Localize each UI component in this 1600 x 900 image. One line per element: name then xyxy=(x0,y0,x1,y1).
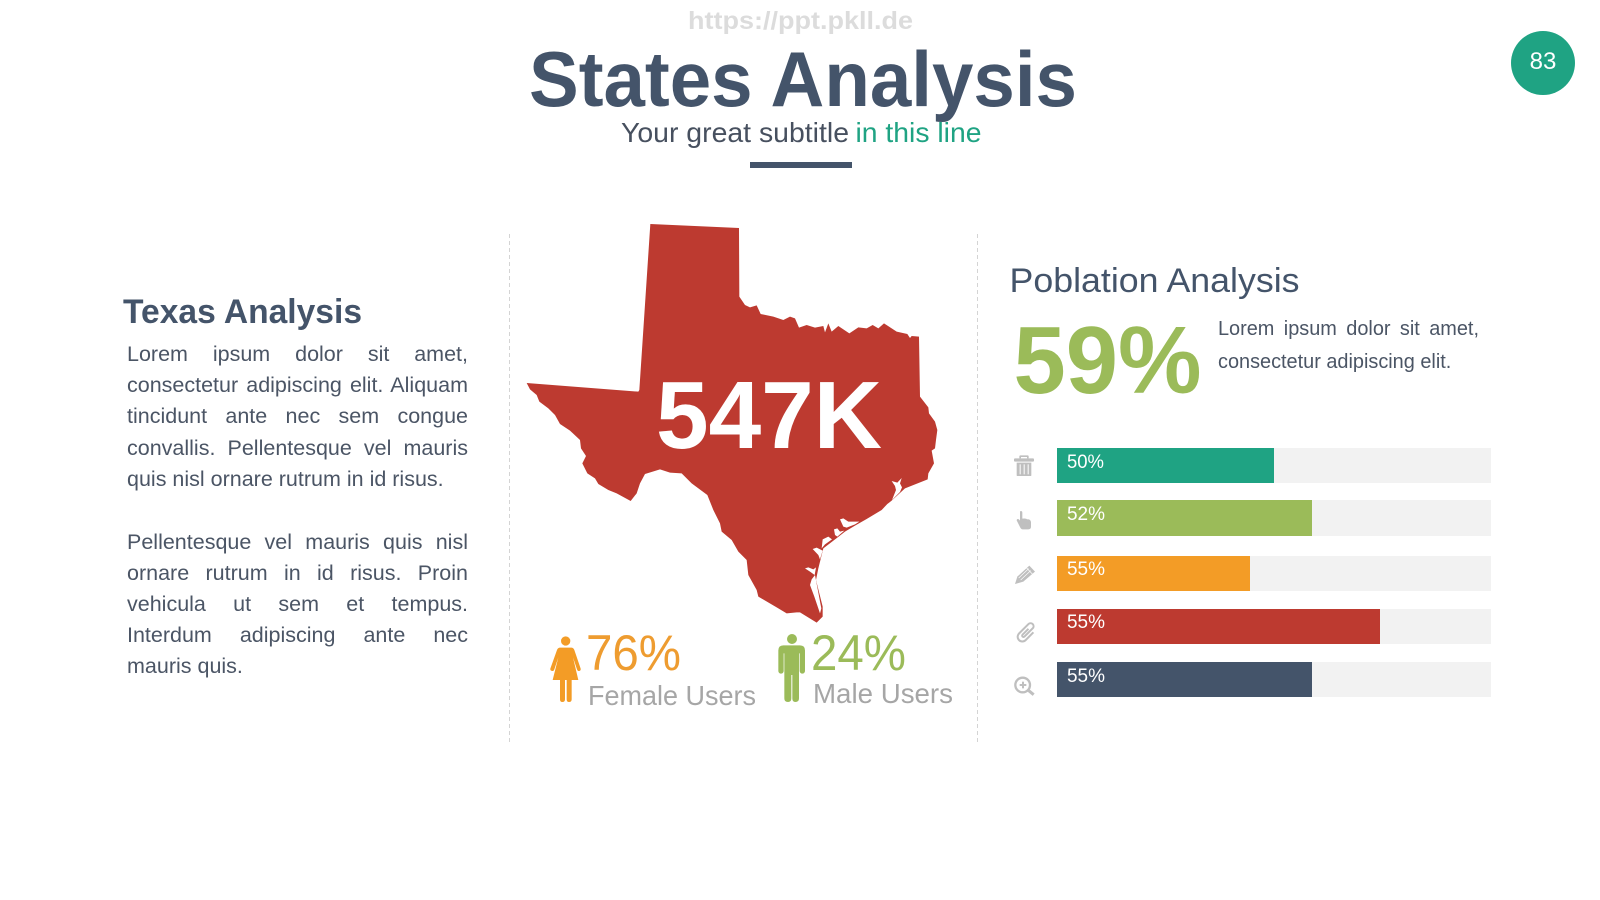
total value: 547K xyxy=(656,362,882,469)
icon: trash xyxy=(1014,455,1034,476)
page number badge: 83 xyxy=(1530,48,1556,75)
text block: Texas paragraph 1: quis nisl ornare rutrum in id risus. xyxy=(127,467,444,491)
map: Texas with total xyxy=(527,224,937,623)
stat: male users xyxy=(778,625,953,709)
text block: Texas paragraph 2: Interdum adipiscing ante nec xyxy=(127,623,468,647)
bar 55% orange xyxy=(1057,556,1491,591)
text block: Texas paragraph 2 xyxy=(127,530,468,678)
stat: female users xyxy=(550,625,756,711)
text block: population description xyxy=(1218,318,1479,373)
bar 55% navy xyxy=(1057,662,1491,697)
subtitle xyxy=(621,117,982,148)
title underline xyxy=(750,162,852,168)
icon: male figure xyxy=(778,634,805,702)
big stat 59%: 59% xyxy=(1014,307,1202,414)
text block: Texas paragraph 2: mauris quis. xyxy=(127,654,243,678)
icon: hand pointer xyxy=(1017,511,1031,529)
bar 55% orange: 55% xyxy=(1067,559,1105,580)
male label: Male Users xyxy=(813,678,953,709)
text block: Texas paragraph 1 xyxy=(127,342,468,491)
bar 50% xyxy=(1057,448,1491,483)
text block: population description: consectetur adipiscing elit. xyxy=(1218,351,1451,373)
title: States Analysis xyxy=(529,35,1077,123)
text block: Texas paragraph 1: convallis. Pellentesque vel mauris xyxy=(127,436,468,460)
watermark url: https://ppt.pkll.de xyxy=(688,7,913,35)
female label: Female Users xyxy=(588,680,756,711)
icon: magnifier xyxy=(1015,678,1034,695)
text block: Texas paragraph 2: vehicula ut sem et tempus. xyxy=(127,592,468,616)
bar chart xyxy=(1057,448,1491,697)
subtitle: Your great subtitle xyxy=(621,117,849,148)
text block: Texas paragraph 2: Pellentesque vel mauris quis nisl xyxy=(127,530,468,554)
text block: Texas paragraph 1: Lorem ipsum dolor sit amet, xyxy=(127,342,468,366)
bar 55% red: 55% xyxy=(1067,612,1105,633)
heading: population analysis: Poblation Analysis xyxy=(1010,262,1300,300)
bar 55% red xyxy=(1057,609,1491,644)
text block: Texas paragraph 2: ornare rutrum in id risus. Proin xyxy=(127,561,468,585)
page number badge xyxy=(1511,31,1575,95)
icon: paperclip xyxy=(1016,622,1037,643)
subtitle: in this line xyxy=(856,117,982,148)
icon: pencil xyxy=(1015,566,1035,584)
bar 55% navy: 55% xyxy=(1067,666,1105,687)
male percentage: 24% xyxy=(811,625,906,681)
bar 50%: 50% xyxy=(1067,452,1104,473)
heading: Texas Analysis: Texas Analysis xyxy=(123,293,362,331)
bar 52% xyxy=(1057,500,1491,536)
text block: Texas paragraph 1: consectetur adipiscing elit. Aliquam xyxy=(127,373,468,397)
icon: female figure xyxy=(550,636,581,702)
text block: Texas paragraph 1: tincidunt ante nec sem congue xyxy=(127,404,468,428)
text block: population description: Lorem ipsum dolor sit amet, xyxy=(1218,318,1479,340)
female percentage: 76% xyxy=(586,625,681,681)
bar 52%: 52% xyxy=(1067,504,1105,525)
